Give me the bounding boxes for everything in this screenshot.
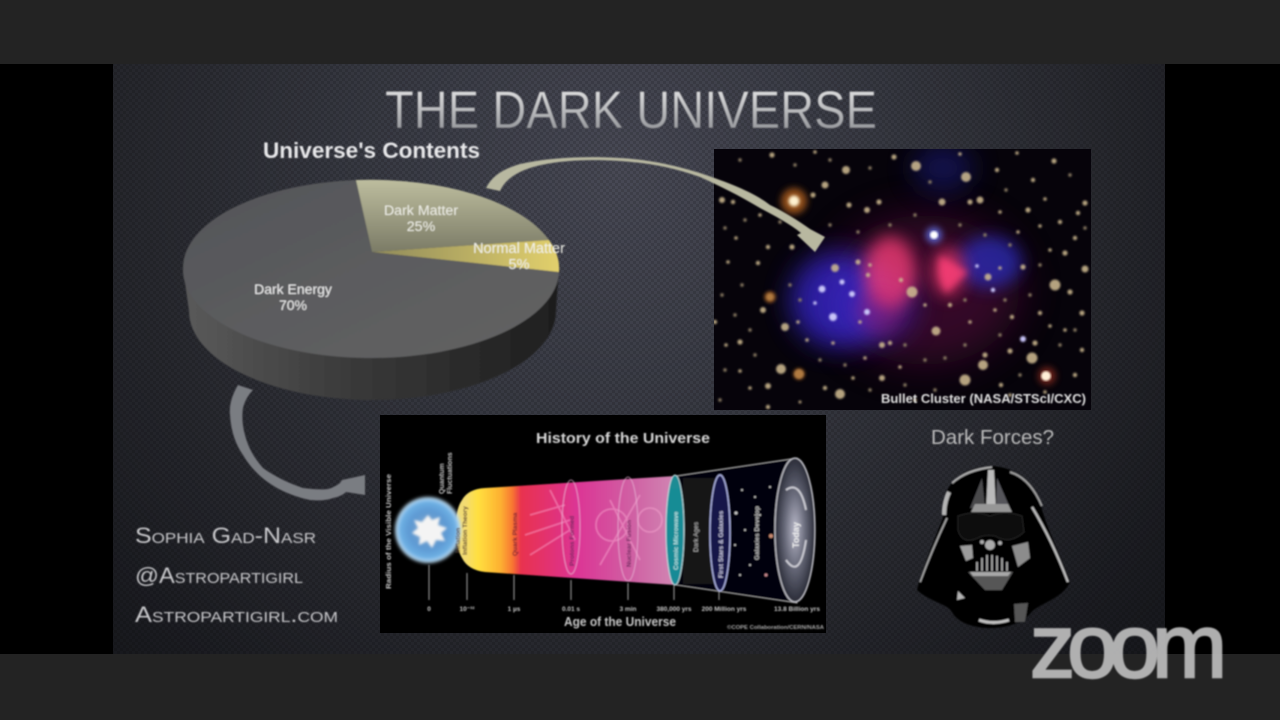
epoch rings (562, 477, 638, 581)
slice: dark matter 25% (356, 180, 549, 252)
author name: Sophia Gad-Nasr (135, 523, 316, 548)
galaxies and stars (713, 150, 1088, 409)
inside labels: Quark Plasma (512, 512, 519, 556)
nose (980, 540, 1002, 550)
eye lenses (958, 513, 1024, 540)
age tick labels: 10⁻³² (460, 606, 475, 613)
inside labels: Galaxies Develop (754, 506, 761, 560)
big bang sphere (395, 497, 461, 563)
axis title: Age of the Universe (564, 615, 676, 629)
label: dark matter: Dark Matter (384, 203, 458, 219)
big bang burst (412, 515, 447, 548)
early universe coloured funnel (456, 475, 674, 586)
image credit: ©COPE Collaboration/CERN/NASA (727, 624, 824, 631)
dome highlights (952, 467, 992, 483)
helmet silhouette (917, 466, 1070, 628)
age tick labels: 3 min (620, 606, 637, 613)
label: normal matter: 5% (509, 257, 530, 273)
side vertical labels: Radius of the Visible Universe (386, 474, 393, 589)
age tick labels: 0.01 s (562, 606, 580, 613)
side vertical labels: Fluctuations (447, 452, 454, 494)
cheek plates (960, 545, 973, 561)
blue dark matter halos (790, 144, 1022, 365)
slide background panel (113, 64, 1165, 654)
slice: normal matter 5% (372, 240, 559, 272)
3D pie chart (183, 180, 565, 400)
galaxy swirl (786, 488, 806, 567)
inside labels: Dark Ages (693, 521, 700, 552)
author credits (135, 523, 338, 627)
website: Astropartigirl.com (135, 602, 338, 627)
dome band (971, 504, 1012, 512)
slice: dark energy 70% (183, 180, 559, 358)
dome centre ridge (986, 470, 996, 510)
side vertical labels (386, 452, 454, 589)
title: THE DARK UNIVERSE (385, 81, 877, 140)
zoom watermark logo: zoom (1030, 597, 1227, 697)
mouth triangle (968, 572, 1013, 590)
starfield of galaxies (734, 486, 783, 576)
label: normal matter: Normal Matter (473, 241, 565, 257)
dome right plane (996, 478, 1010, 508)
brim edges (920, 518, 947, 582)
bullet cluster image (713, 144, 1091, 410)
inside labels: Nuclear Fusion (626, 520, 633, 567)
warm stars lower right and left (764, 291, 1056, 385)
side vertical labels: Quantum (439, 463, 446, 494)
inside labels: Protons Formed (569, 516, 576, 566)
age tick labels (427, 606, 820, 613)
age tick labels: 0 (427, 606, 431, 613)
breathing grille (977, 555, 1007, 571)
label: dark energy: 70% (279, 297, 307, 313)
bright blue star (926, 227, 942, 243)
inside labels: Inflation Theory (462, 506, 469, 555)
inside labels: Today (791, 522, 801, 548)
inside labels: Cosmic Microwave (673, 511, 680, 570)
age tick labels: 1 µs (508, 606, 521, 613)
arrow: dark matter slice to bullet cluster (486, 157, 825, 252)
faint background galaxies (718, 158, 1087, 402)
top letterbox bar (0, 0, 1280, 64)
age tick labels: 13.8 Billion yrs (774, 606, 820, 613)
heading: universe's contents: Universe's Contents (263, 138, 480, 163)
twitter handle: @Astropartigirl (135, 563, 303, 588)
icon: darth vader helmet (917, 466, 1070, 628)
chin accents (979, 620, 1009, 622)
label: dark matter: 25% (407, 219, 436, 235)
cosmic microwave background disc (666, 475, 684, 585)
inside labels: First Stars & Galaxies (718, 510, 725, 578)
diagram title: History of the Universe (536, 431, 710, 447)
bright blue-white galaxies in the cluster (813, 264, 1026, 342)
bottom letterbox bar (0, 654, 1280, 720)
bright orange foreground star (781, 188, 807, 214)
inside labels (455, 506, 801, 578)
inside labels: Inflation (455, 528, 462, 553)
dome left plane (970, 478, 985, 508)
dark later universe funnel (675, 458, 797, 603)
age tick labels: 200 Million yrs (702, 606, 747, 613)
pie side wall (183, 268, 559, 400)
history of the universe diagram (380, 415, 826, 633)
left black side bar (0, 64, 113, 654)
first stars disc (710, 475, 730, 591)
right black side bar (1165, 64, 1280, 654)
image caption: Bullet Cluster (NASA/STScI/CXC) (881, 392, 1086, 406)
axis ticks (429, 565, 719, 600)
dark ages band (683, 478, 715, 584)
pink gas clouds (856, 236, 968, 334)
galaxy today disc (775, 458, 815, 602)
label: dark energy: Dark Energy (254, 281, 332, 297)
heading: dark forces: Dark Forces? (931, 427, 1054, 449)
arrow: dark energy to history of the universe (230, 385, 365, 500)
age tick labels: 380,000 yrs (656, 606, 692, 613)
